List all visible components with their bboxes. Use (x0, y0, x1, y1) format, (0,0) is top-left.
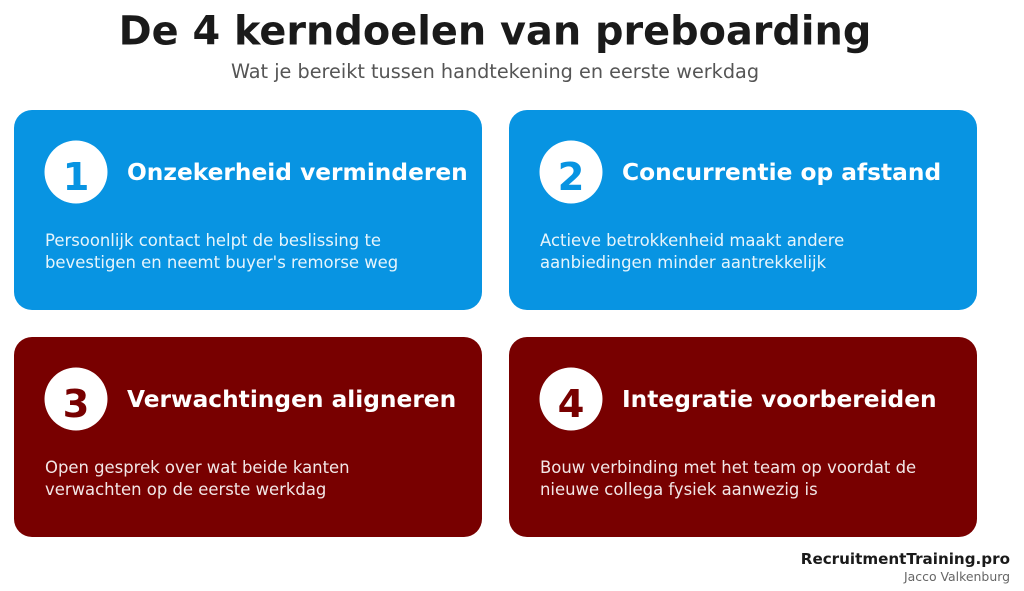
icon: number 3 (44, 368, 108, 430)
text: card 1: Persoonlijk contact helpt de beslissing te (45, 231, 381, 250)
text: card 3: verwachten op de eerste werkdag (45, 480, 326, 499)
text: card 1: bevestigen en neemt buyer's remorse weg (45, 253, 398, 272)
icon: number 1: 1 (63, 155, 89, 200)
icon: number 2: 2 (558, 155, 584, 200)
panel: card 1 (14, 110, 482, 310)
heading: card 1: Onzekerheid verminderen (127, 159, 468, 186)
panel: card 3 (14, 337, 482, 537)
icon: number 4: 4 (558, 382, 584, 427)
panel: card 2 (509, 110, 977, 310)
brand name: RecruitmentTraining.pro (801, 550, 1010, 568)
heading: card 2: Concurrentie op afstand (622, 159, 941, 186)
icon: number 4 (540, 368, 602, 430)
icon: number 1 (44, 140, 108, 204)
text: card 2: Actieve betrokkenheid maakt andere (540, 231, 844, 250)
heading: card 3: Verwachtingen aligneren (127, 386, 456, 413)
text: card 4: Bouw verbinding met het team op voordat de (540, 458, 916, 477)
icon: number 3: 3 (63, 382, 89, 427)
heading: card 4: Integratie voorbereiden (622, 386, 937, 413)
title: De 4 kerndoelen van preboarding (119, 8, 871, 54)
author name: Jacco Valkenburg (903, 569, 1010, 584)
text: card 2: aanbiedingen minder aantrekkelijk (540, 253, 827, 272)
icon: number 2 (540, 140, 602, 204)
panel: card 4 (509, 337, 977, 537)
text: card 3: Open gesprek over wat beide kanten (45, 458, 350, 477)
text: card 4: nieuwe collega fysiek aanwezig is (540, 480, 818, 499)
subtitle: Wat je bereikt tussen handtekening en eerste werkdag (231, 60, 759, 83)
